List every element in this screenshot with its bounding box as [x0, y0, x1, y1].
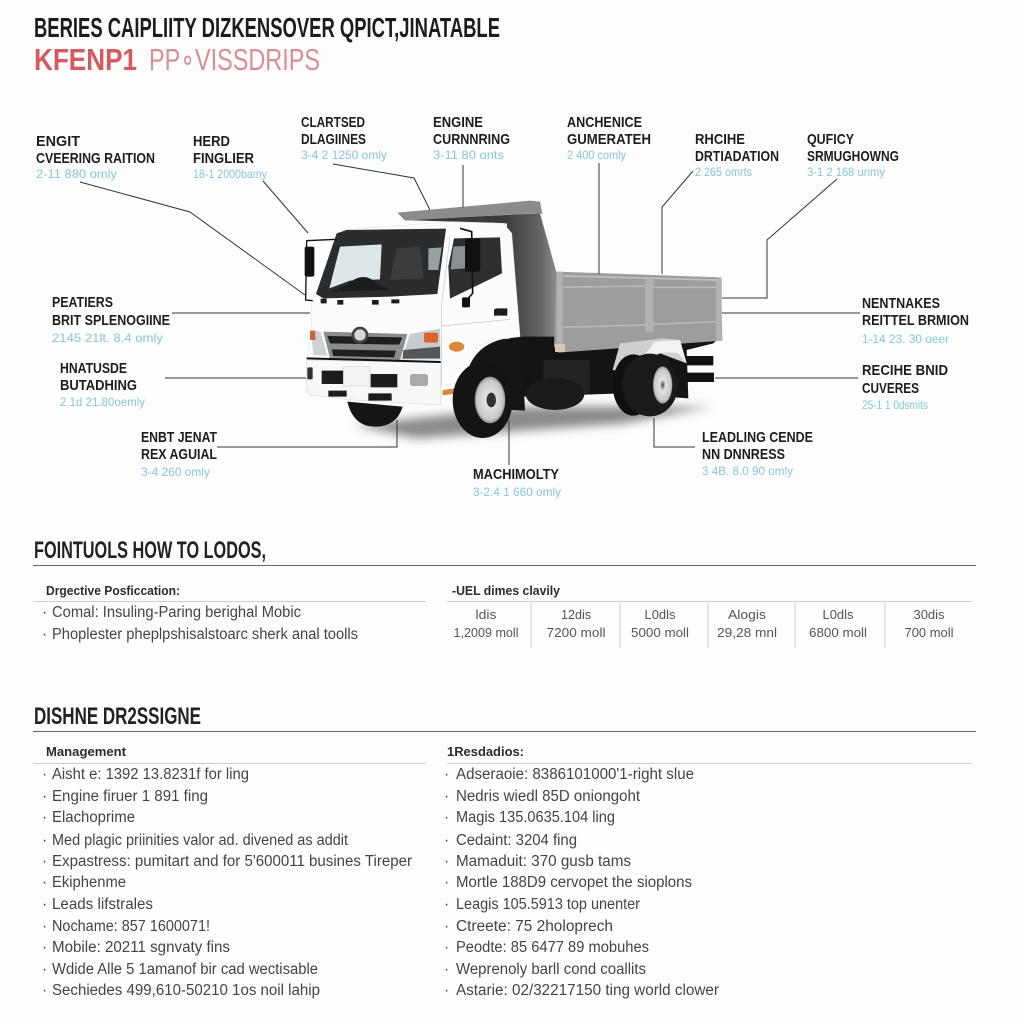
panel: management list: Med plagic priinities valor ad. divened as addit	[52, 832, 349, 849]
panel: management list: ·	[42, 853, 47, 870]
panel: management list: Elachoprime	[52, 809, 135, 826]
table: dimensions: L0dls	[644, 607, 676, 622]
section heading: second: DISHNE DR2SSIGNE	[34, 703, 201, 730]
door handle and lamp	[494, 308, 507, 316]
panel: resdadios list: ·	[444, 918, 449, 935]
panel: management list: Expastress: pumitart and for 5'600011 busines Tireper	[52, 853, 412, 870]
label: top 6: RHCIHE	[695, 131, 745, 148]
panel: management list: Sechiedes 499,610-50210 1os noil lahip	[52, 982, 320, 999]
label: middle right 2: RECIHE BNID	[862, 362, 948, 379]
panel: specification notes: Drgective Posficcation:	[46, 583, 180, 598]
panel: management list: ·	[42, 874, 47, 891]
table: dimensions: Alogis	[728, 607, 767, 622]
fuel box	[543, 360, 590, 393]
panel: resdadios list: ·	[444, 788, 449, 805]
label: bottom left: 3-4 260 omly	[141, 465, 210, 479]
bumper	[307, 358, 467, 405]
label: top 5	[567, 114, 651, 162]
panel: management list: Management	[46, 744, 127, 759]
label: middle left 2: 2 1d 21.80oemly	[60, 395, 145, 409]
panel: management list: ·	[42, 896, 47, 913]
table: dimensions: 29,28 mnl	[717, 625, 777, 640]
panel: resdadios list: Adseraoie: 8386101000'1-right slue	[456, 766, 694, 783]
panel: management list: Mobile: 20211 sgnvaty fins	[52, 939, 230, 956]
ground shadow	[353, 407, 712, 438]
panel: resdadios list: Mortle 188D9 cervopet the sioplons	[456, 874, 692, 891]
label: middle right 1: REITTEL BRMION	[862, 312, 969, 329]
label: top 3: CLARTSED	[301, 114, 365, 131]
panel: management list: ·	[42, 766, 47, 783]
panel: resdadios list: Ctreete: 75 2holoprech	[456, 918, 613, 935]
label: middle right 2: 25-1 1 0dsmits	[862, 398, 928, 412]
mirrors	[305, 228, 480, 307]
table: dimensions: 700 moll	[904, 625, 954, 640]
leader lines	[80, 163, 860, 465]
label: middle left 2: BUTADHING	[60, 377, 137, 394]
panel: management list: ·	[42, 939, 47, 956]
panel: resdadios list: Peodte: 85 6477 89 mobuhes	[456, 939, 649, 956]
middle wheel	[526, 378, 584, 410]
panel: resdadios list: ·	[444, 832, 449, 849]
panel: management list: Nochame: 857 1600071!	[52, 918, 210, 935]
panel: resdadios list: ·	[444, 766, 449, 783]
panel: resdadios list: Astarie: 02/32217150 ting world clower	[456, 982, 719, 999]
label: top 7: SRMUGHOWNG	[807, 148, 899, 165]
dump headboard	[403, 213, 557, 347]
table: dimensions: -UEL dimes clavily	[452, 583, 561, 598]
chassis	[503, 337, 718, 398]
table: dimensions: ldis	[476, 607, 497, 622]
title	[34, 12, 500, 77]
title: PP∘VISSDRIPS	[149, 42, 320, 77]
panel: resdadios list: ·	[444, 896, 449, 913]
label: top left 1: ENGIT	[36, 133, 80, 150]
label: bottom left: REX AGUIAL	[141, 446, 217, 463]
panel: resdadios list: Magis 135.0635.104 ling	[456, 809, 615, 826]
label: top 7: QUFICY	[807, 131, 854, 148]
label: top 4: 3-11 80 onts	[433, 148, 504, 162]
label: bottom right: 3 4B. 8.0 90 omly	[702, 464, 793, 478]
cargo bed	[554, 272, 722, 353]
hood vents	[321, 299, 399, 305]
headlights	[310, 329, 441, 359]
label: bottom centre	[473, 466, 561, 499]
panel: resdadios list: Weprenoly barll cond coallits	[456, 961, 646, 978]
panel: resdadios list: Leagis 105.5913 top unenter	[456, 896, 640, 913]
label: top 5: GUMERATEH	[567, 131, 651, 148]
door seam	[442, 237, 510, 385]
panel: resdadios list: ·	[444, 982, 449, 999]
title: BERIES CAIPLIITY DIZKENSOVER QPICT,JINATABLE	[34, 12, 500, 43]
panel: resdadios list	[444, 744, 972, 999]
panel: specification notes: Comal: Insuling-Paring berighal Mobic	[52, 604, 301, 621]
label: top 6	[695, 131, 779, 179]
cab	[307, 222, 520, 404]
front left tyre	[347, 402, 403, 427]
label: top 4	[433, 114, 510, 162]
panel: resdadios list: ·	[444, 853, 449, 870]
table: dimensions: 6800 moll	[809, 625, 867, 640]
truck illustration	[305, 201, 722, 438]
label: middle left 1: BRIT SPLENOGIINE	[52, 312, 170, 329]
panel: management list: ·	[42, 961, 47, 978]
label: top 6: 2 265 omrts	[695, 165, 752, 179]
rear bars	[687, 356, 714, 382]
label: middle right 2: CUVERES	[862, 380, 919, 397]
label: top 7	[807, 131, 899, 179]
mudguard	[613, 338, 687, 373]
panel: specification notes: Phoplester pheplpshisalstoarc sherk anal toolls	[52, 626, 358, 643]
panel: specification notes: ·	[42, 626, 47, 643]
label: bottom right: LEADLING CENDE	[702, 429, 813, 446]
panel: management list: ·	[42, 918, 47, 935]
label: bottom centre: 3-2.4 1 660 omly	[473, 485, 561, 499]
panel: resdadios list: ·	[444, 874, 449, 891]
label: bottom centre: MACHIMOLTY	[473, 466, 559, 483]
panel: resdadios list: ·	[444, 939, 449, 956]
rear wheel	[613, 354, 678, 416]
panel: management list	[33, 744, 426, 999]
label: top 3: DLAGIINES	[301, 131, 366, 148]
label: bottom left: ENBT JENAT	[141, 429, 217, 446]
label: top left 2: FINGLIER	[193, 150, 254, 167]
front right wheel	[453, 362, 513, 438]
wheel arch	[464, 338, 525, 411]
label: middle left 2	[60, 360, 145, 409]
canopy	[397, 201, 542, 221]
label: top left 1: 2-11 880 omly	[36, 167, 117, 181]
label: top 5: ANCHENICE	[567, 114, 642, 131]
table: dimensions: 5000 moll	[631, 625, 689, 640]
table: dimensions: L0dls	[822, 607, 854, 622]
panel: management list: Leads lifstrales	[52, 896, 153, 913]
label: top left 1	[36, 133, 155, 181]
table: dimensions: 12dis	[561, 607, 591, 622]
label: top 5: 2 400 comly	[567, 148, 626, 162]
table: dimensions: 1,2009 moll	[454, 625, 519, 640]
panel: management list: Wdide Alle 5 1amanof bir cad wectisable	[52, 961, 318, 978]
panel: resdadios list: Cedaint: 3204 fing	[456, 832, 577, 849]
label: bottom right	[702, 429, 813, 478]
label: middle right 1	[862, 295, 969, 346]
panel: management list: Aisht e: 1392 13.8231f for ling	[52, 766, 249, 783]
label: top 4: ENGINE	[433, 114, 483, 131]
section heading: first: FOINTUOLS HOW TO LODOS,	[34, 537, 266, 564]
label: top 3: 3-4 2 1250 omly	[301, 148, 387, 162]
label: middle left 1	[52, 294, 170, 345]
label: top left 2: 18-1 2000bamy	[193, 167, 267, 181]
label: middle left 2: HNATUSDE	[60, 360, 127, 377]
label: top left 1: CVEERING RAITION	[36, 150, 155, 167]
table: dimensions: 7200 moll	[546, 625, 606, 640]
panel: management list: ·	[42, 809, 47, 826]
panel: management list: Engine firuer 1 891 fing	[52, 788, 208, 805]
grille	[323, 327, 407, 361]
panel: specification notes: ·	[42, 604, 47, 621]
label: top left 2	[193, 133, 267, 181]
panel: specification notes	[33, 583, 426, 643]
label: top 6: DRTIADATION	[695, 148, 779, 165]
label: middle right 1: 1-14 23. 30 oeer	[862, 332, 949, 346]
label: bottom left	[141, 429, 217, 479]
panel: resdadios list: Nedris wiedl 85D oniongoht	[456, 788, 641, 805]
table: dimensions: 30dis	[914, 607, 945, 622]
label: middle right 1: NENTNAKES	[862, 295, 940, 312]
label: middle left 1: PEATIERS	[52, 294, 113, 311]
windshield	[316, 229, 446, 298]
label: top 3	[301, 114, 387, 162]
panel: resdadios list: 1Resdadios:	[447, 744, 524, 759]
door window	[448, 237, 502, 299]
label: middle left 1: 2145 21lt. 8.4 omly	[52, 331, 163, 345]
title: KFENP1	[34, 42, 137, 77]
label: top left 2: HERD	[193, 133, 230, 150]
panel: management list: ·	[42, 788, 47, 805]
label: middle right 2	[862, 362, 948, 412]
panel: resdadios list: Mamaduit: 370 gusb tams	[456, 853, 631, 870]
panel: resdadios list: ·	[444, 961, 449, 978]
label: bottom right: NN DNNRESS	[702, 446, 785, 463]
table: dimensions	[447, 583, 972, 648]
label: top 7: 3-1 2 168 unmy	[807, 165, 885, 179]
panel: resdadios list: ·	[444, 809, 449, 826]
label: top 4: CURNNRING	[433, 131, 510, 148]
panel: management list: ·	[42, 982, 47, 999]
panel: management list: Ekiphenme	[52, 874, 126, 891]
panel: management list: ·	[42, 832, 47, 849]
